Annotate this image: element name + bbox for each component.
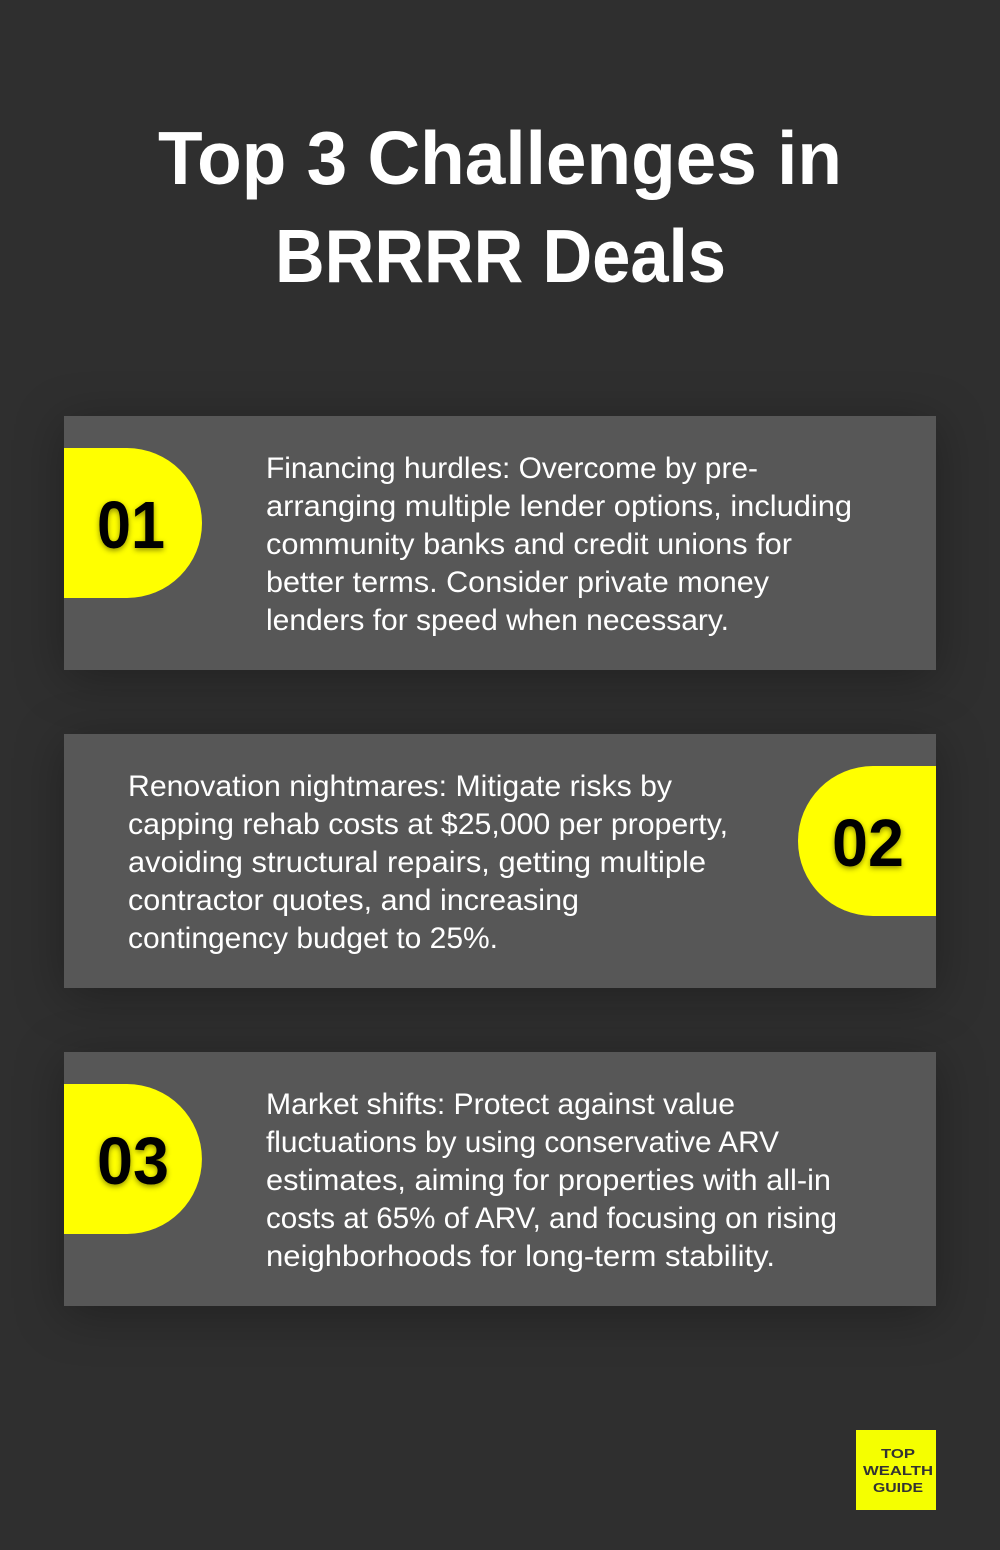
text block 1: lenders for speed when necessary.: [266, 604, 729, 637]
text block 2: contingency budget to 25%.: [128, 922, 498, 955]
card background 2: [64, 734, 936, 988]
panel: challenge 3 market shifts: [64, 1052, 936, 1306]
card background 3: [64, 1052, 936, 1306]
text block 3: [266, 1088, 837, 1273]
logo: Top Wealth Guide: WEALTH: [863, 1463, 933, 1478]
text block 1: better terms. Consider private money: [266, 566, 769, 599]
text block 1: community banks and credit unions for: [266, 528, 792, 561]
number badge 03: 03: [97, 1124, 169, 1199]
title: [158, 116, 842, 298]
panel: challenge 1 financing hurdles: [64, 416, 936, 670]
text block 1: arranging multiple lender options, including: [266, 490, 852, 523]
text block 2: contractor quotes, and increasing: [128, 884, 579, 917]
text block 2: [128, 770, 728, 955]
number badge 01: [64, 448, 202, 598]
number badge 01: 01: [97, 488, 165, 563]
title: Top 3 Challenges in: [158, 116, 842, 200]
text block 2: Renovation nightmares: Mitigate risks by: [128, 770, 672, 803]
text block 3: neighborhoods for long-term stability.: [266, 1240, 775, 1273]
number badge 02: [798, 766, 936, 916]
text block 1: Financing hurdles: Overcome by pre-: [266, 452, 758, 485]
text block 1: [266, 452, 852, 637]
text block 2: avoiding structural repairs, getting multiple: [128, 846, 706, 879]
text block 3: fluctuations by using conservative ARV: [266, 1126, 779, 1159]
number badge 03: [64, 1084, 202, 1234]
text block 2: capping rehab costs at $25,000 per property,: [128, 808, 728, 841]
text block 3: estimates, aiming for properties with all-in: [266, 1164, 831, 1197]
text block 3: Market shifts: Protect against value: [266, 1088, 735, 1121]
text block 3: costs at 65% of ARV, and focusing on rising: [266, 1202, 837, 1235]
title: BRRRR Deals: [275, 214, 726, 298]
logo: Top Wealth Guide: GUIDE: [873, 1480, 923, 1495]
number badge 02: 02: [832, 806, 904, 881]
logo: Top Wealth Guide: TOP: [881, 1446, 915, 1461]
panel: challenge 2 renovation nightmares: [64, 734, 936, 988]
card background 1: [64, 416, 936, 670]
logo: Top Wealth Guide: [856, 1430, 936, 1510]
